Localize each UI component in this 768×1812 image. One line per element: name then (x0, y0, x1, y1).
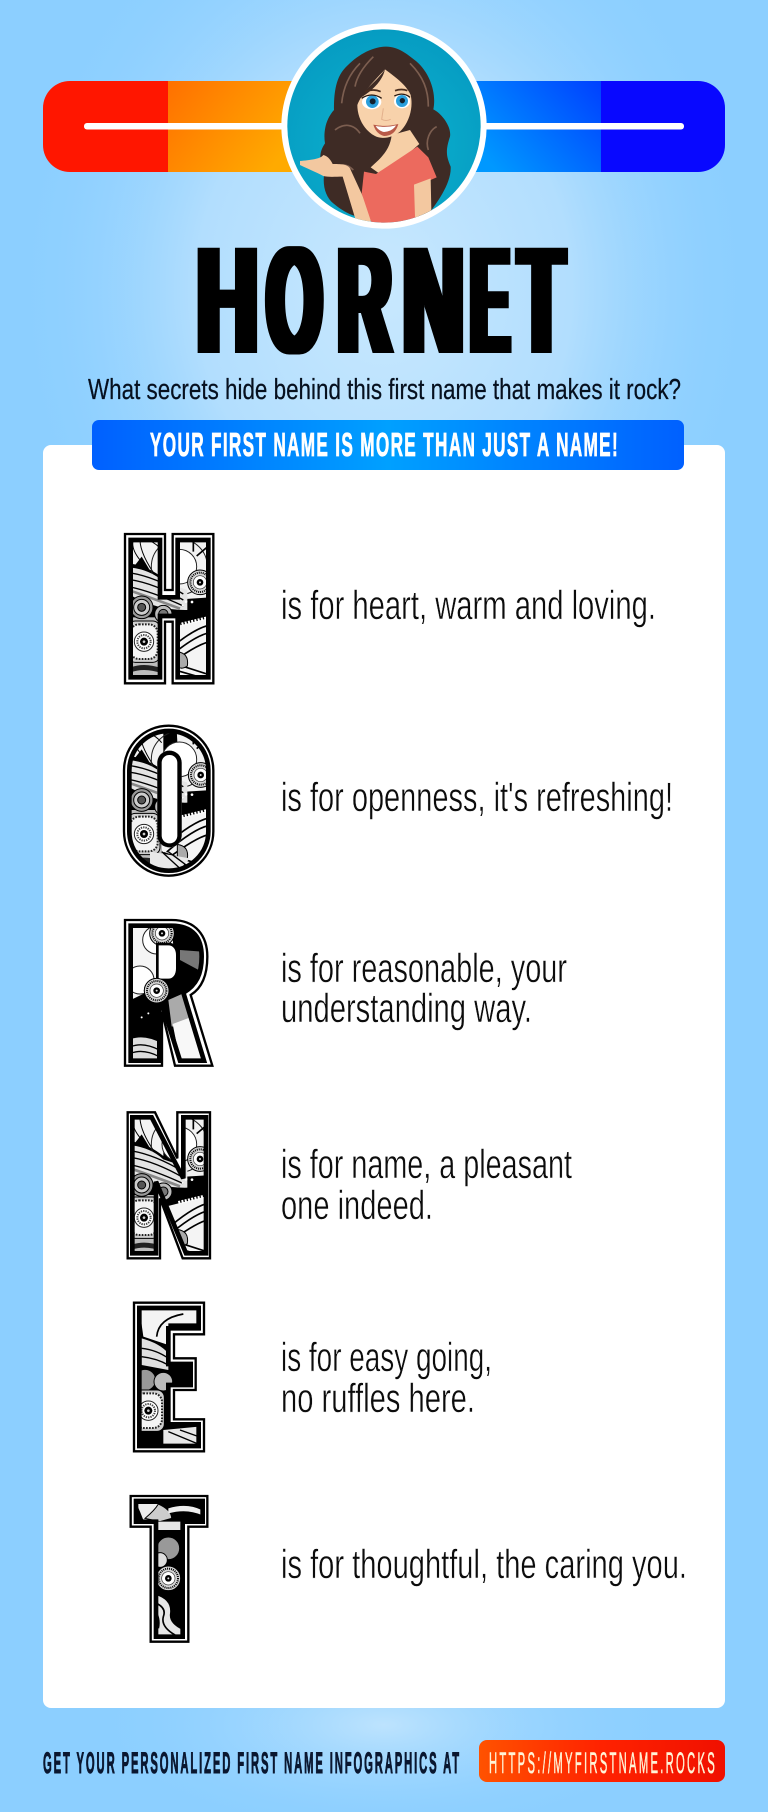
text E: is for easy going, (281, 1334, 492, 1380)
hair (320, 47, 451, 217)
header gradient bar (43, 81, 725, 172)
right arm (414, 178, 431, 220)
row N (120, 1101, 572, 1261)
letter R (124, 918, 214, 1067)
title: N (403, 215, 464, 386)
title: O (267, 215, 322, 386)
text E: no ruffles here. (281, 1375, 475, 1421)
text N: one indeed. (281, 1182, 433, 1228)
mouth (373, 124, 398, 136)
text R (281, 945, 567, 1031)
arm and hand (300, 155, 371, 223)
letter O (122, 724, 214, 877)
row H (120, 523, 656, 683)
white content panel (43, 445, 725, 1708)
eyes (362, 95, 381, 109)
text N: is for name, a pleasant (281, 1141, 572, 1187)
letter H (124, 532, 214, 684)
footer URL button (479, 1740, 725, 1782)
text R: understanding way. (281, 985, 532, 1031)
face (357, 69, 412, 138)
row O (120, 716, 673, 876)
title: T (518, 215, 563, 386)
shirt (362, 147, 437, 223)
row T (120, 1493, 687, 1653)
letter N (126, 1111, 212, 1260)
banner (92, 420, 684, 470)
row E (120, 1297, 492, 1457)
letter E (132, 1302, 206, 1452)
avatar: woman in circular frame (281, 23, 487, 229)
text N (281, 1141, 572, 1228)
neck (371, 130, 419, 174)
text E (281, 1334, 492, 1421)
title: E (471, 215, 509, 386)
title: H (197, 215, 258, 386)
row R (120, 913, 567, 1073)
title (197, 215, 568, 386)
text R: is for reasonable, your (281, 945, 567, 991)
title: R (338, 215, 391, 386)
letter T (130, 1494, 208, 1643)
